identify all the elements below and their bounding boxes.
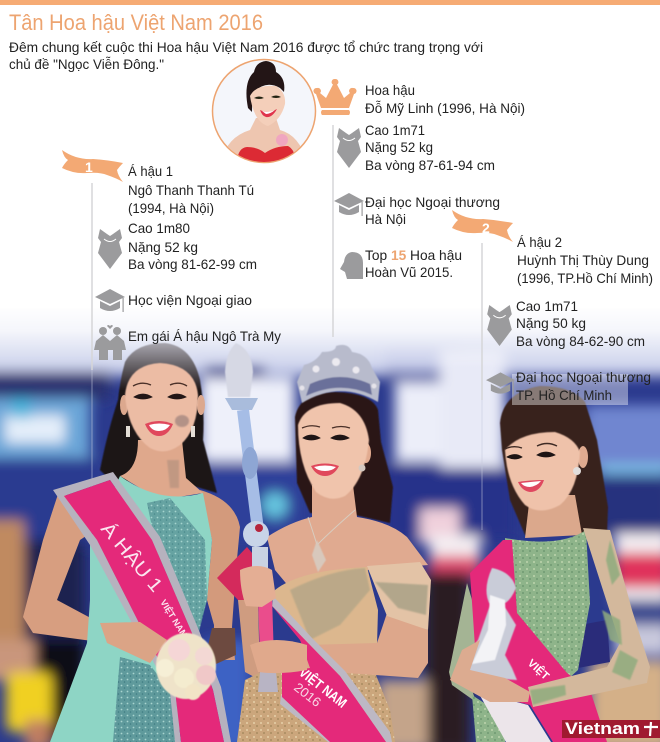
text: Á hậu 2 school (516, 369, 651, 403)
logo: Vietnam+: Vietnam (565, 719, 640, 738)
flag: rank 1 (62, 150, 123, 182)
text: Á hậu 2 measurements (516, 298, 645, 349)
sleeve sequins (530, 540, 638, 705)
sash (272, 606, 386, 742)
right arm (200, 490, 240, 660)
teal dress (50, 476, 212, 742)
icon: sisters (94, 325, 126, 360)
flower bouquet (156, 633, 216, 700)
eyes, brows and mouth (133, 383, 187, 436)
plus sign (644, 722, 658, 736)
icon: crown (313, 79, 357, 115)
title: Tân Hoa hậu Việt Nam 2016 (9, 10, 263, 35)
photo: Á hậu 1, left woman (23, 343, 240, 742)
intro text: Đêm chung kết cuộc thi Hoa hậu Việt Nam 2016 được tổ chức trang trọng với (9, 39, 483, 55)
icon: graduation cap (334, 193, 364, 216)
lower hand (250, 640, 307, 673)
icon: swimsuit (98, 229, 122, 269)
upper hand (240, 566, 276, 607)
text: Á hậu 1 measurements (128, 220, 257, 272)
green skirt (472, 695, 510, 742)
sash text (96, 518, 190, 640)
intro text: chủ đề "Ngọc Viễn Đông." (9, 56, 164, 72)
white sash end (478, 692, 551, 742)
sash text: VIỆT NAM (158, 597, 190, 640)
intro text (9, 39, 483, 72)
earrings (128, 426, 193, 437)
text: Á hậu 1 name (128, 163, 254, 216)
text: Á hậu 2 school: Đại học Ngoại thương (516, 369, 651, 385)
icon: female head (340, 252, 363, 279)
earring (358, 464, 366, 472)
text: Á hậu 2 measurements: Nặng 50 kg (516, 315, 586, 331)
sash silver edge (53, 472, 231, 742)
gap behind torso (578, 620, 610, 668)
green bodice (505, 530, 590, 680)
text: Á hậu 1 measurements: Nặng 52 kg (128, 239, 198, 255)
icon: swimsuit (337, 128, 361, 168)
scepter (225, 343, 278, 692)
sleeve (528, 528, 650, 707)
left arm below hand (238, 600, 260, 680)
sleeve sequins (375, 582, 428, 615)
portrait: Đỗ Mỹ Linh (212, 60, 316, 168)
ears (120, 395, 205, 415)
text: Hoa hậu measurements: Nặng 52 kg (365, 139, 433, 155)
neck (525, 495, 582, 538)
hair (500, 386, 608, 535)
sequin upper panel (147, 498, 207, 640)
sequin skirt (113, 657, 177, 742)
timeline lines (92, 125, 482, 400)
text: Hoa hậu measurements (365, 122, 495, 173)
photo: Á hậu 2, right woman (449, 386, 650, 742)
face (298, 403, 369, 499)
chest and neck (267, 485, 428, 600)
eyes, brows and mouth (302, 426, 350, 476)
trophy (456, 568, 517, 680)
text: Á hậu 1 measurements: Cao 1m80 (128, 220, 190, 236)
text: Hoa hậu name (365, 82, 525, 116)
text: Hoa hậu measurements: Ba vòng 87-61-94 cm (365, 157, 495, 173)
text: Hoa hậu school: Đại học Ngoại thương (365, 194, 500, 210)
text: Á hậu 1 school: Học viện Ngoại giao (128, 292, 252, 308)
text: Hoa hậu school (365, 194, 500, 227)
text: Á hậu 2 name: Huỳnh Thị Thùy Dung (517, 252, 649, 268)
sash silver edge (272, 596, 392, 742)
icon: graduation cap (95, 289, 125, 312)
text: Á hậu 2 name: Á hậu 2 (517, 234, 562, 250)
text: Hoa hậu name: Hoa hậu (365, 82, 415, 98)
text: Hoa hậu measurements: Cao 1m71 (365, 122, 425, 138)
eyes, brows and mouth (505, 444, 557, 492)
sash (64, 480, 224, 742)
hair (295, 392, 393, 523)
ear (578, 446, 588, 468)
flag: rank 2: 2 (482, 220, 490, 236)
sash text: 2016 (291, 680, 324, 710)
flag: rank 1: 1 (85, 159, 93, 175)
bracelet hand (207, 628, 236, 664)
sash text: VIỆT (525, 657, 552, 683)
text: Á hậu 2 name (517, 234, 653, 286)
photo: Hoa hậu, centre woman (217, 343, 431, 742)
dress skirt (237, 660, 395, 742)
earring (573, 467, 581, 475)
text: Hoa hậu name: Đỗ Mỹ Linh (1996, Hà Nội) (365, 100, 525, 116)
sash (470, 540, 607, 742)
text: Top 15 (365, 247, 462, 280)
text: Hoa hậu school: Hà Nội (365, 211, 406, 227)
necklace (308, 510, 355, 572)
text: Á hậu 2 name: (1996, TP.Hồ Chí Minh) (517, 270, 653, 286)
text: Top 15: Top 15 Hoa hậu (365, 247, 462, 263)
text: Top 15: Hoàn Vũ 2015. (365, 264, 453, 280)
flag: rank 2 (452, 210, 513, 242)
text: Á hậu 2 measurements: Ba vòng 84-62-90 cm (516, 333, 645, 349)
hand (450, 640, 530, 702)
neck shadow (167, 460, 179, 488)
text: Á hậu 2 measurements: Cao 1m71 (516, 298, 578, 314)
hair (100, 343, 217, 493)
photo: blurred stage backdrop (0, 300, 660, 742)
text: sister note: Em gái Á hậu Ngô Trà My (128, 328, 281, 344)
icon: graduation cap (486, 372, 515, 395)
text: Á hậu 1 name: (1994, Hà Nội) (128, 200, 214, 216)
dress bodice (273, 567, 378, 648)
text: Á hậu 1 name: Á hậu 1 (128, 163, 173, 179)
arm (303, 613, 428, 678)
sash text: VIỆT NAM (296, 663, 351, 711)
translucent band behind right text (512, 374, 628, 405)
bodice sequins (290, 568, 370, 640)
left sleeve (449, 583, 478, 702)
crown (297, 345, 380, 403)
icon: swimsuit (487, 305, 512, 346)
cheek shadow (175, 415, 189, 427)
top bar (0, 0, 660, 5)
logo: Vietnam+ (562, 719, 660, 738)
chest and neck (120, 440, 203, 500)
fade from white into photo (0, 306, 660, 368)
arm, shoulder and hand (23, 488, 167, 663)
text: Á hậu 1 name: Ngô Thanh Thanh Tú (128, 182, 254, 198)
sheer sleeve (367, 562, 431, 630)
text: Á hậu 2 school: TP. Hồ Chí Minh (516, 387, 612, 403)
text: Á hậu 1 measurements: Ba vòng 81-62-99 cm (128, 256, 257, 272)
face (125, 363, 198, 451)
hand over sash (100, 622, 167, 663)
face (505, 432, 580, 510)
left sash tail (217, 547, 258, 600)
ear (361, 443, 371, 463)
sash text: Á HẬU 1 (96, 518, 167, 597)
